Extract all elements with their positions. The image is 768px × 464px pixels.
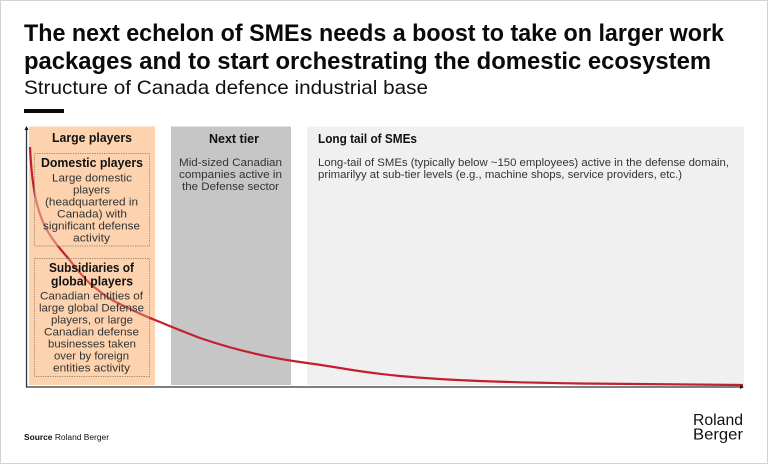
- panel: large players background: [29, 126, 155, 385]
- curve: company size distribution: [30, 147, 743, 385]
- panel: long tail text: Long tail of SMEs: [318, 132, 417, 146]
- box: subsidiaries of global players: Subsidiaries of: [49, 261, 135, 275]
- panel: long tail text: [318, 132, 729, 181]
- title: The next echelon of SMEs needs a boost to take on larger work: [24, 20, 724, 47]
- box: domestic players: activity: [73, 232, 111, 244]
- box: subsidiaries of global players: global players: [51, 274, 133, 288]
- logo: Roland Berger: Roland: [693, 412, 743, 429]
- box: subsidiaries of global players: large global Defense: [39, 302, 144, 314]
- source note: Source Roland Berger: [24, 433, 109, 442]
- heading: large players: Large players: [52, 131, 132, 145]
- panel: next tier text: the Defense sector: [182, 181, 279, 193]
- box: domestic players: significant defense: [43, 220, 140, 232]
- panel: next tier text: Mid-sized Canadian: [179, 157, 282, 169]
- accent bar: [24, 109, 64, 113]
- title: [24, 20, 724, 75]
- axes: [24, 126, 744, 389]
- box: subsidiaries of global players: entities activity: [53, 362, 131, 374]
- panel: long tail text: primarilyy at sub-tier levels (e.g., machine shops, service providers, etc.): [318, 169, 682, 181]
- panel: next tier text: [179, 132, 282, 193]
- chart: defence industrial base structure: [24, 126, 744, 389]
- box: subsidiaries of global players: over by foreign: [54, 350, 129, 362]
- box: subsidiaries of global players: players, or large: [51, 314, 133, 326]
- panel: next tier text: Next tier: [209, 132, 259, 146]
- panel: next tier text: companies active in: [179, 169, 282, 181]
- panel: long tail background: [307, 126, 744, 385]
- panel: long tail text: Long-tail of SMEs (typically below ~150 employees) active in the defense domain,: [318, 157, 729, 169]
- box: domestic players: Domestic players: [41, 156, 143, 170]
- box: subsidiaries of global players: [34, 258, 150, 376]
- title: packages and to start orchestrating the domestic ecosystem: [24, 48, 711, 75]
- box: domestic players: [34, 154, 150, 246]
- subtitle: Structure of Canada defence industrial base: [24, 77, 428, 99]
- logo: Roland Berger: [693, 412, 744, 444]
- box: subsidiaries of global players: Canadian defense: [44, 326, 139, 338]
- box: subsidiaries of global players: Canadian entities of: [40, 290, 144, 302]
- panel: large players: [34, 131, 150, 376]
- panel: next tier background: [171, 126, 291, 385]
- box: domestic players: Canada) with: [57, 208, 127, 220]
- box: domestic players: Large domestic: [52, 172, 133, 184]
- logo: Roland Berger: Berger: [693, 426, 744, 444]
- box: subsidiaries of global players: businesses taken: [48, 338, 136, 350]
- box: domestic players: players: [73, 184, 111, 196]
- box: domestic players: (headquartered in: [45, 196, 138, 208]
